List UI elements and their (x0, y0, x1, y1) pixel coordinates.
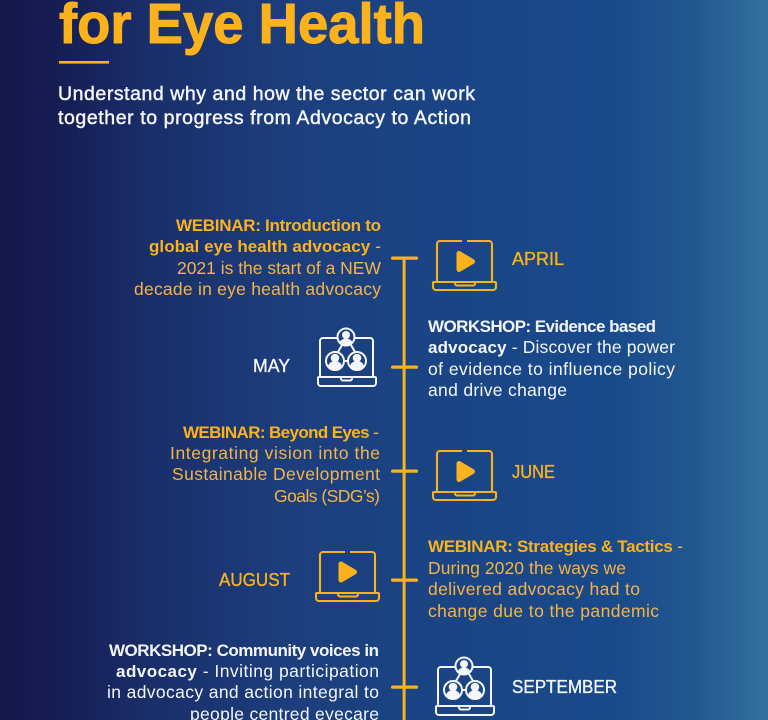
April webinar text: decade in eye health advocacy (134, 279, 381, 299)
August webinar text: delivered advocacy had to (428, 579, 640, 599)
April webinar text: global eye health advocacy - (149, 236, 381, 256)
month: August: AUGUST (219, 570, 290, 590)
August webinar text: During 2020 the ways we (428, 558, 626, 578)
month: June: JUNE (512, 462, 555, 482)
September workshop text (107, 641, 379, 720)
June webinar text: Sustainable Development (172, 464, 380, 484)
August webinar text (428, 536, 683, 621)
June webinar text: Goals (SDG’s) (274, 486, 380, 506)
May workshop text: advocacy - Discover the power (428, 337, 675, 357)
subtitle (58, 83, 475, 129)
May workshop text (428, 317, 675, 400)
icon: April video laptop (433, 241, 496, 290)
April webinar text (134, 216, 381, 299)
September workshop text: advocacy - Inviting participation (116, 661, 379, 681)
subtitle: Understand why and how the sector can work (58, 83, 475, 105)
icon: May workshop laptop (318, 328, 376, 386)
April webinar text: 2021 is the start of a NEW (177, 258, 381, 278)
June webinar text: WEBINAR: Beyond Eyes - (183, 422, 379, 442)
June webinar text: Integrating vision into the (170, 443, 380, 463)
subtitle: together to progress from Advocacy to Action (58, 107, 471, 129)
August webinar text: WEBINAR: Strategies & Tactics - (428, 536, 683, 556)
month: September: SEPTEMBER (512, 677, 617, 697)
April webinar text: WEBINAR: Introduction to (176, 216, 381, 235)
August webinar text: change due to the pandemic (428, 601, 659, 621)
May workshop text: WORKSHOP: Evidence based (428, 317, 656, 336)
May workshop text: of evidence to influence policy (428, 359, 675, 379)
month: May: MAY (253, 356, 290, 376)
September workshop text: WORKSHOP: Community voices in (109, 641, 379, 660)
September workshop text: in advocacy and action integral to (107, 682, 379, 702)
month: April: APRIL (512, 249, 564, 269)
June webinar text (170, 422, 380, 506)
icon: June video laptop (433, 451, 496, 500)
icon: August video laptop (316, 552, 379, 601)
May workshop text: and drive change (428, 380, 567, 400)
icon: September workshop laptop (436, 658, 494, 715)
title underline (59, 61, 109, 64)
timeline (391, 256, 418, 720)
